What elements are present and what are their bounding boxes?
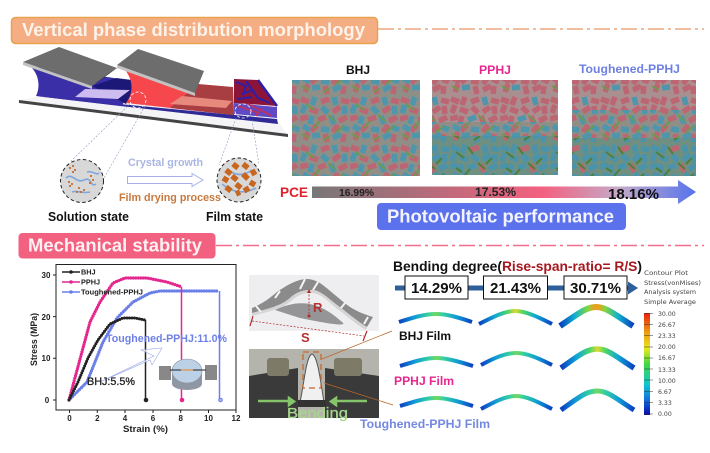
heading: mechanical stability: Mechanical stability bbox=[28, 234, 203, 256]
photo: bending test fixture bbox=[249, 349, 379, 422]
contour row: toughened-PPHJ film bbox=[400, 391, 634, 410]
photo: bending test fixture: Bending bbox=[287, 405, 348, 422]
axis tick labels: 20 bbox=[42, 313, 51, 322]
text: contour plot info: Stress(vonMises) bbox=[644, 279, 701, 287]
box: 21.43% bbox=[484, 276, 548, 299]
curve: PPHJ bbox=[69, 278, 184, 402]
annotation: toughened-PPHJ elongation: Toughened-PPHJ:11.0% bbox=[106, 333, 227, 345]
icon: tensile tester bbox=[159, 359, 217, 390]
axis tick labels: 8 bbox=[178, 414, 183, 423]
box: 14.29%: 14.29% bbox=[411, 280, 462, 297]
contour row: BHJ film bbox=[399, 307, 633, 326]
legend: stress color bar: 23.33 bbox=[658, 333, 676, 340]
red ink bbox=[125, 70, 234, 115]
legend: stress color bar: 16.67 bbox=[658, 355, 676, 362]
text: contour plot info: Analysis system bbox=[644, 288, 696, 296]
legend: stress color bar: 0.00 bbox=[658, 411, 672, 418]
morphology panel: PPHJ bbox=[432, 80, 558, 175]
morphology panel: Toughened-PPHJ bbox=[572, 80, 696, 176]
chart legend: BHJ bbox=[81, 268, 96, 276]
blue ink bbox=[30, 66, 132, 106]
curve: toughened-PPHJ bbox=[69, 291, 222, 402]
text: film drying process: Film drying process bbox=[119, 192, 221, 204]
axis tick labels: 12 bbox=[232, 414, 241, 423]
contour row: PPHJ film bbox=[400, 349, 634, 368]
annotation: BHJ elongation: BHJ:5.5% bbox=[87, 376, 135, 388]
blades bbox=[23, 47, 117, 86]
illustration: bent film with rise and span: R bbox=[313, 300, 323, 315]
curve: BHJ bbox=[69, 318, 148, 402]
arrow: bending degree axis bbox=[395, 282, 638, 294]
heading: bending degree: Bending degree(Rise-span-ratio= R/S) bbox=[393, 259, 642, 275]
value: PPHJ PCE: 17.53% bbox=[475, 185, 516, 199]
chart legend: PPHJ bbox=[81, 278, 100, 286]
arrow: crystal growth to film state bbox=[128, 174, 203, 186]
compression arrows bbox=[258, 398, 367, 405]
rise marker bbox=[308, 291, 310, 316]
connector lines from photo to films bbox=[322, 331, 393, 405]
value: Toughened-PPHJ PCE: 18.16% bbox=[608, 186, 659, 203]
label: BHJ: BHJ bbox=[346, 63, 370, 77]
axis tick labels: 10 bbox=[42, 354, 51, 363]
box: 30.71% bbox=[564, 276, 627, 299]
axis tick labels: 6 bbox=[151, 414, 156, 423]
chart legend: Toughened-PPHJ bbox=[81, 288, 143, 296]
legend: stress color bar: 26.67 bbox=[658, 322, 676, 329]
box: 30.71%: 30.71% bbox=[570, 280, 621, 297]
legend: stress color bar: 3.33 bbox=[658, 400, 672, 407]
axis tick labels: 10 bbox=[204, 414, 213, 423]
axis tick labels: 0 bbox=[45, 396, 50, 405]
icon: film state circle bbox=[217, 158, 261, 202]
arrow: PCE gradient bbox=[312, 180, 696, 204]
legend: stress color bar: 10.00 bbox=[658, 378, 676, 385]
label: BHJ film: BHJ Film bbox=[399, 329, 451, 343]
box: 14.29% bbox=[405, 276, 468, 299]
substrate plate bbox=[20, 92, 287, 134]
legend: stress color bar: 20.00 bbox=[658, 344, 676, 351]
arrow: elongation increase bbox=[100, 348, 162, 382]
icon: solution state circle bbox=[60, 160, 104, 202]
illustration: bent film with rise and span bbox=[249, 275, 379, 345]
axis tick labels: 0 bbox=[67, 414, 72, 423]
axis tick labels: 4 bbox=[123, 414, 128, 423]
morphology panel: BHJ bbox=[292, 80, 420, 176]
label: toughened-PPHJ film: Toughened-PPHJ Film bbox=[360, 417, 490, 431]
illustration: bent film with rise and span: S bbox=[301, 330, 310, 345]
label: Toughened-PPHJ: Toughened-PPHJ bbox=[579, 62, 680, 76]
axis tick labels: 2 bbox=[95, 414, 100, 423]
device schematic: blade coating bbox=[19, 47, 288, 178]
film block bbox=[234, 79, 277, 106]
legend: stress color bar: 30.00 bbox=[658, 311, 676, 318]
text: contour plot info bbox=[644, 269, 701, 306]
legend: stress color bar: 6.67 bbox=[658, 389, 672, 396]
axis title: strain: Strain (%) bbox=[123, 424, 168, 435]
span marker bbox=[252, 321, 364, 336]
value: BHJ PCE: 16.99% bbox=[339, 188, 374, 199]
legend: stress color bar bbox=[644, 311, 676, 418]
box: 21.43%: 21.43% bbox=[490, 280, 541, 297]
label: solution state: Solution state bbox=[48, 210, 129, 224]
text: contour plot info: Contour Plot bbox=[644, 269, 688, 277]
stress-strain chart bbox=[29, 264, 241, 435]
text: contour plot info: Simple Average bbox=[644, 298, 696, 306]
axis title: stress: Stress (MPa) bbox=[29, 313, 39, 366]
label: film state: Film state bbox=[206, 210, 263, 224]
axis tick labels: 30 bbox=[42, 271, 51, 280]
heading: photovoltaic performance: Photovoltaic performance bbox=[387, 206, 614, 226]
text: crystal growth: Crystal growth bbox=[128, 157, 203, 169]
label: PPHJ film: PPHJ Film bbox=[394, 374, 454, 388]
zoom ellipses and guide lines bbox=[130, 92, 146, 108]
heading: vertical phase distribution morphology: Vertical phase distribution morphology bbox=[22, 20, 365, 40]
chart legend bbox=[62, 268, 143, 296]
legend: stress color bar: 13.33 bbox=[658, 367, 676, 374]
label: PPHJ: PPHJ bbox=[479, 63, 511, 77]
axis tick labels bbox=[42, 271, 241, 423]
label: PCE: PCE bbox=[280, 185, 308, 200]
